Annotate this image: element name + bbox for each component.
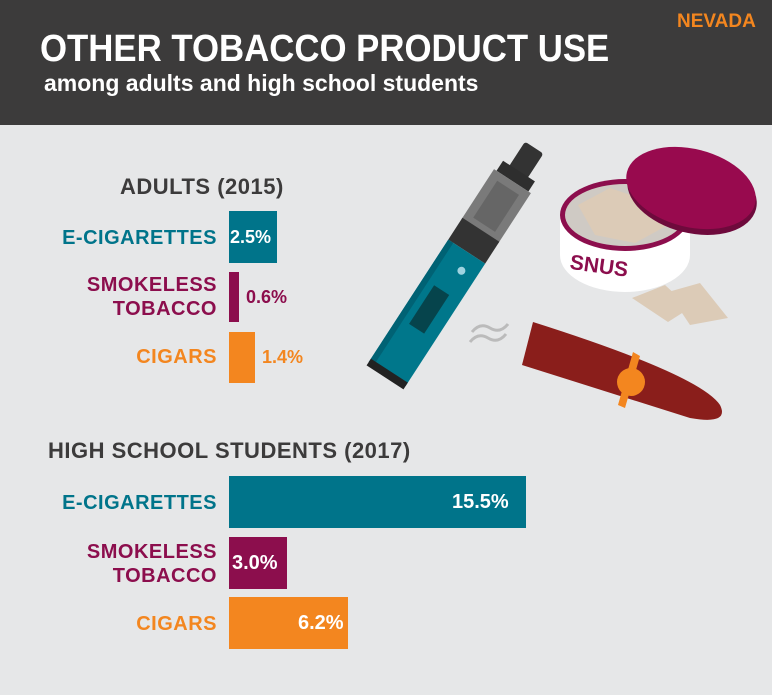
hs smokeless: [87, 537, 287, 589]
section heading: high school: HIGH SCHOOL STUDENTS (2017): [48, 438, 411, 463]
hs e-cigarettes: 15.5%: [452, 491, 509, 513]
icon: e-cigarette: [367, 136, 553, 389]
icon: snus can: [560, 134, 766, 325]
hs cigars: 6.2%: [298, 612, 344, 634]
subtitle: among adults and high school students: [44, 70, 478, 96]
hs smokeless: TOBACCO: [113, 565, 217, 587]
adults e-cigarettes: E-CIGARETTES: [62, 227, 217, 249]
icon: smoke: [470, 324, 508, 342]
header bar: [0, 0, 772, 125]
hs cigars: [136, 597, 348, 649]
state label: NEVADA: [677, 11, 756, 32]
adults cigars: 1.4%: [262, 347, 303, 367]
adults e-cigarettes: 2.5%: [230, 227, 271, 247]
hs cigars: CIGARS: [136, 613, 217, 635]
adults smokeless: 0.6%: [246, 287, 287, 307]
adults cigars: CIGARS: [136, 346, 217, 368]
hs smokeless: 3.0%: [232, 552, 278, 574]
hs smokeless: SMOKELESS: [87, 541, 217, 563]
icon: cigar: [522, 322, 722, 420]
adults cigars: [136, 332, 303, 383]
adults smokeless: TOBACCO: [113, 298, 217, 320]
section heading: adults: ADULTS (2015): [120, 174, 284, 199]
hs e-cigarettes: [62, 476, 526, 528]
adults smokeless: SMOKELESS: [87, 274, 217, 296]
title: OTHER TOBACCO PRODUCT USE: [40, 28, 609, 70]
adults smokeless: [87, 272, 287, 322]
adults e-cigarettes: [62, 211, 277, 263]
hs e-cigarettes: E-CIGARETTES: [62, 492, 217, 514]
icon: snus can: SNUS: [568, 251, 629, 282]
